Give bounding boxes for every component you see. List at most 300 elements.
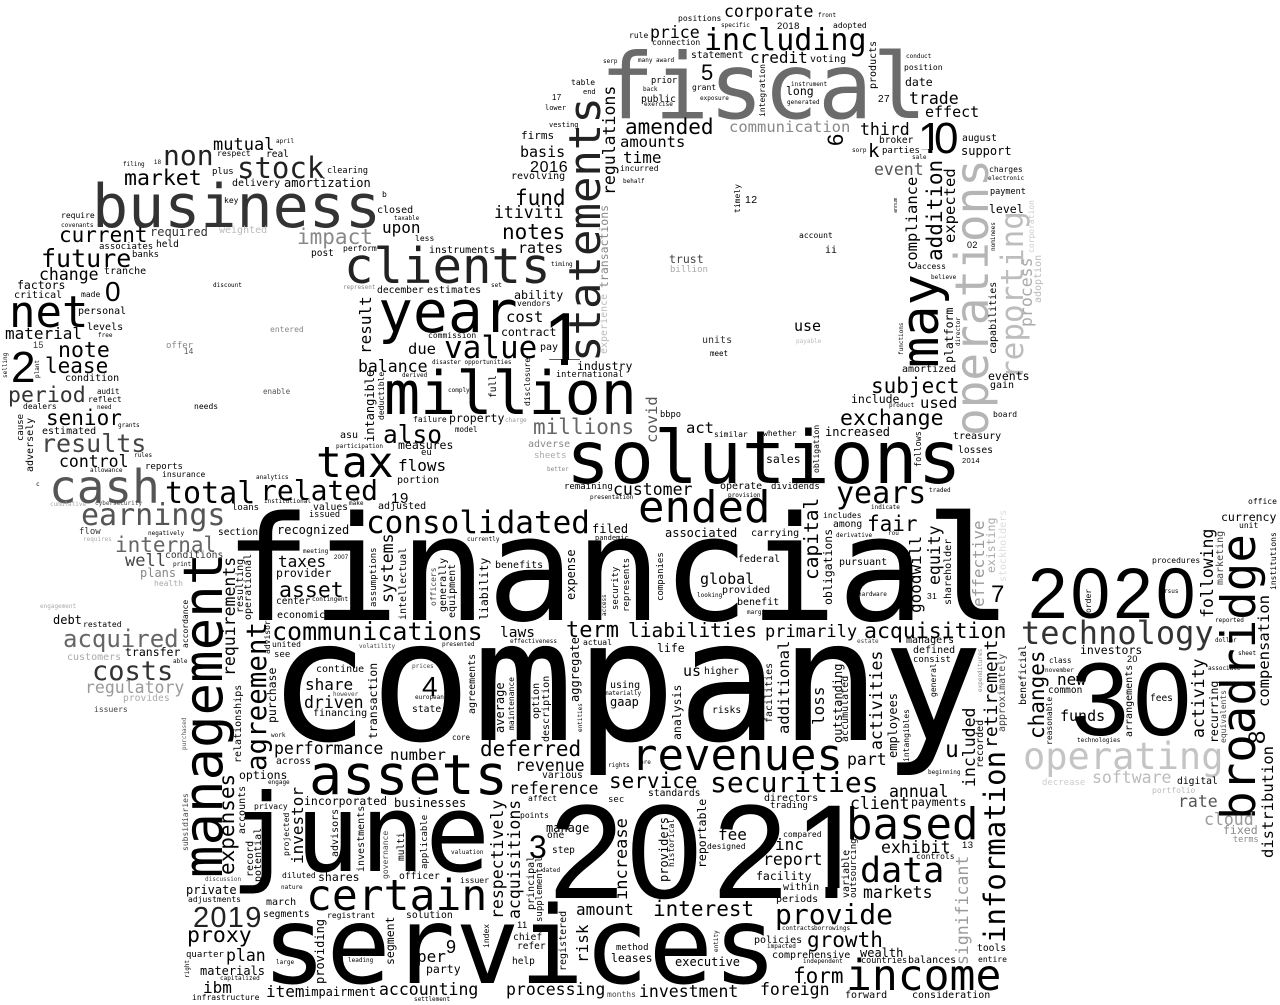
words: top arc around fiscal: position <box>904 63 943 72</box>
words: communications band and inside company: part <box>847 750 887 769</box>
words: bottom left block: solution <box>406 910 453 921</box>
word: reporting: reporting <box>995 211 1031 379</box>
words: inside financial: federal <box>738 554 780 565</box>
words: left arc: conditions <box>165 550 223 561</box>
words: centre column above financial: adverse <box>528 439 570 450</box>
words: communications band and inside company: accumulated <box>840 676 851 742</box>
words: top arc around fiscal: 17 <box>552 93 562 102</box>
words: bottom right block: trading <box>770 801 808 811</box>
words: centre column above financial: commission <box>428 331 476 340</box>
words: bottom left block: incorporated <box>304 794 387 808</box>
words: bottom right block: inc <box>775 835 804 854</box>
words: top arc around fiscal: dividends <box>771 482 820 492</box>
words: right wing: fixed <box>1223 823 1258 837</box>
words: centre column above financial: b <box>382 190 387 199</box>
words: top arc around fiscal: event <box>874 160 924 179</box>
words: right wing: 20 <box>1127 654 1138 664</box>
words: top arc around fiscal: serp <box>603 58 618 65</box>
words: top arc around fiscal: sale <box>912 154 927 161</box>
words: centre column above financial: contract <box>501 325 556 339</box>
words: communications band and inside company: expenditures <box>977 648 984 692</box>
words: bottom centre block: step <box>552 845 575 856</box>
words: centre column above financial: property <box>449 411 504 425</box>
words: bottom centre block: points <box>520 811 549 820</box>
words: left arc: debt <box>53 613 82 627</box>
words: left arc: note <box>58 338 110 363</box>
words: top arc around fiscal: 02 <box>967 240 978 250</box>
words: right wing: software <box>1092 768 1171 787</box>
words: bottom left block: businesses <box>394 796 466 810</box>
words: left arc: negatively <box>148 530 185 537</box>
words: top arc around fiscal: behalf <box>623 178 645 185</box>
words: top arc around fiscal: many award <box>638 57 675 64</box>
words: communications band and inside company: activities <box>867 651 886 750</box>
words: communications band and inside company: materially <box>605 690 642 697</box>
word: company: company <box>268 584 984 780</box>
words: top arc around fiscal: capabilities <box>988 282 999 354</box>
words: left arc: flow <box>79 527 101 537</box>
words: bottom left block: segments <box>263 909 310 920</box>
words: top arc around fiscal: sorp <box>852 147 867 154</box>
words: left arc: factors <box>17 278 65 292</box>
words: top arc around fiscal: august <box>962 133 997 144</box>
words: top arc around fiscal: rule <box>629 31 648 40</box>
words: centre column above financial: less <box>415 234 434 243</box>
words: right wing: dollar <box>1215 637 1237 644</box>
words: inside financial: obligations <box>821 529 835 605</box>
words: inside financial: 2007 <box>334 555 349 561</box>
words: communications band and inside company: loss <box>809 686 828 725</box>
words: inside financial: economic <box>277 610 325 621</box>
words: bottom right block: tools <box>977 943 1006 954</box>
words: top arc around fiscal: nominees <box>990 222 997 251</box>
words: left arc: c <box>36 481 40 488</box>
words: bottom right block: consideration <box>912 990 990 1001</box>
words: inside financial: companies <box>656 552 666 601</box>
words: left arc: accordance <box>181 600 190 648</box>
word: year: year <box>378 278 518 346</box>
words: bottom left block: valuation <box>451 849 484 856</box>
words: left arc: free <box>98 332 113 339</box>
words: top arc around fiscal: long <box>786 84 814 98</box>
words: inside financial: equity <box>925 525 944 585</box>
words: centre column above financial: timing <box>551 261 573 268</box>
words: top arc around fiscal: generated <box>787 99 820 106</box>
words: bottom left block: governance <box>381 831 390 879</box>
words: top arc around fiscal <box>545 2 1044 492</box>
words: right wing: procedures <box>1152 556 1200 565</box>
word: years: years <box>836 476 926 511</box>
words: inside financial: 7 <box>991 581 1005 608</box>
words: bottom centre block: providers <box>657 817 671 882</box>
words: top arc around fiscal: broker <box>879 135 914 146</box>
words: inside financial: filed <box>592 522 628 536</box>
words: inside financial: benefit <box>737 597 779 608</box>
words: right wing: sheet <box>1238 650 1256 657</box>
words: bottom centre block: amount <box>576 900 634 919</box>
words: communications band and inside company: analysis <box>670 685 684 740</box>
words: top arc around fiscal: annum <box>893 198 899 213</box>
words: bottom left block: 9 <box>446 937 457 957</box>
word: million: million <box>384 359 637 429</box>
words: bottom right block: outsourcing <box>849 838 859 898</box>
words: left arc: control <box>59 452 129 471</box>
words: inside financial: goodwill <box>906 536 925 613</box>
words: centre column above financial: industry <box>577 359 632 373</box>
words: centre column above financial: millions <box>533 415 634 439</box>
word: ended: ended <box>638 482 770 533</box>
words: bottom centre block: executive <box>675 955 740 969</box>
words: communications band and inside company: defined <box>913 645 955 656</box>
words: top arc around fiscal: director <box>955 317 962 346</box>
words: bottom centre block: months <box>607 990 636 999</box>
words: top arc around fiscal: payable <box>796 338 822 345</box>
words: right wing: associate <box>1208 665 1241 672</box>
word: assets: assets <box>309 743 508 807</box>
words: bottom left block: officer <box>399 871 440 882</box>
words: top arc around fiscal: payment <box>990 187 1026 197</box>
words: bottom right block: form <box>793 964 844 988</box>
words: inside financial: meeting <box>303 548 329 555</box>
words: top arc around fiscal: credit <box>750 48 808 67</box>
words: top arc around fiscal: integration <box>758 64 767 117</box>
words: top arc around fiscal: products <box>868 41 879 89</box>
words: communications band and inside company: us <box>683 662 701 680</box>
words: top arc around fiscal: adopted <box>833 21 867 30</box>
words: bottom right block: facility <box>756 869 811 883</box>
words: centre column above financial: comply <box>448 387 470 394</box>
words: left arc: april <box>276 138 294 145</box>
words: inside financial: effective <box>969 520 988 607</box>
words: bottom right block: markets <box>863 883 933 902</box>
words: inside financial: rou <box>888 530 899 537</box>
words: centre column above financial: covid <box>643 396 661 443</box>
word: information: information <box>978 751 1012 943</box>
words: left arc: future <box>41 244 131 273</box>
words: right wing: reported <box>1215 617 1244 624</box>
words: inside financial: pandemic <box>595 534 629 542</box>
words: centre column above financial: pay <box>540 342 558 353</box>
words: top arc around fiscal: timely <box>733 184 742 213</box>
words: left arc: weighted <box>219 225 267 236</box>
words: bottom left block: private <box>186 883 237 897</box>
words: top arc around fiscal: amended <box>625 115 714 139</box>
words: right wing: beneficial <box>1018 645 1029 705</box>
words: top arc around fiscal: whether <box>763 429 797 438</box>
words: inside financial: represents <box>622 558 632 612</box>
words: left arc: estimated <box>42 426 96 437</box>
words: right wing: november <box>1045 667 1074 674</box>
words: left arc: require <box>61 211 95 220</box>
words: bottom centre block: refer <box>517 941 546 952</box>
words: centre column above financial: asu <box>340 430 358 441</box>
words: top arc around fiscal: similar <box>714 430 748 439</box>
words: bottom left block: nature <box>281 884 303 891</box>
words: communications band and inside company: continue <box>316 664 364 675</box>
words: top arc around fiscal: communication <box>729 118 850 136</box>
words: left arc: real <box>266 149 289 160</box>
words: communications band and inside company: retirement <box>981 640 1002 748</box>
words: bottom left block: issuer <box>460 876 489 885</box>
words: inside financial: matrix <box>612 543 634 550</box>
words: right wing: distribution <box>1259 746 1277 858</box>
words: bottom left block: potential <box>253 828 264 882</box>
words: right wing: common <box>1048 685 1082 696</box>
words: left arc: 18 <box>154 160 162 166</box>
words: communications band and inside company: work <box>271 732 286 739</box>
words: top arc around fiscal: billion <box>670 265 708 275</box>
word: 30: 30 <box>1071 642 1196 758</box>
words: left arc: needs <box>194 402 218 411</box>
words: left arc: discount <box>213 282 242 289</box>
words: top arc around fiscal: meet <box>710 349 728 358</box>
words: bottom centre block: principal <box>526 856 537 910</box>
words: left arc: senior <box>46 406 122 430</box>
word: 2: 2 <box>11 343 37 392</box>
words: communications band and inside company: deferred <box>480 737 581 761</box>
words: right wing: fees <box>1150 693 1173 704</box>
words: inside financial: recognized <box>277 523 349 537</box>
word: 2021: 1 <box>794 778 874 927</box>
words: communications band and inside company: state <box>412 704 441 715</box>
words: communications band and inside company: facilities <box>764 663 775 723</box>
words: bottom centre block: help <box>512 956 535 967</box>
words: inside financial: expense <box>564 549 578 600</box>
words: bottom centre block: affect <box>528 794 557 803</box>
words: bottom left block: registrant <box>327 911 375 920</box>
words: left arc: 15 <box>33 340 44 350</box>
words: left arc: acquired <box>63 625 179 653</box>
words: bottom centre block: reference <box>509 779 598 798</box>
words: communications band and inside company: beginning <box>928 769 961 776</box>
words: communications band and inside company: using <box>610 680 640 691</box>
words: inside financial: shareholder <box>943 539 954 605</box>
words: left arc: perform <box>343 244 377 253</box>
words: left arc: amortization <box>284 176 371 190</box>
words: bottom right block <box>756 793 1007 1001</box>
words: top arc around fiscal: increased <box>825 425 890 439</box>
words: bottom centre block: dated <box>542 867 560 874</box>
words: bottom left block: infrastructure <box>192 993 260 1002</box>
words: bottom left block: accounts <box>237 786 248 834</box>
words: inside financial: 31 <box>927 591 937 601</box>
words: left arc: need <box>97 404 112 411</box>
words: top arc around fiscal: price <box>650 23 700 42</box>
words: inside financial: traded <box>929 487 951 494</box>
word: provide: provide <box>775 898 893 931</box>
words: left arc: represent <box>343 284 376 291</box>
words: left arc: selling <box>2 352 9 378</box>
words: communications band and inside company: description <box>541 676 552 742</box>
words: top arc around fiscal: end <box>583 88 596 96</box>
words: top arc around fiscal: corporation <box>1027 200 1036 253</box>
word: statements: statements <box>560 97 611 362</box>
words: right wing: terms <box>1233 835 1259 845</box>
words: left arc: tranche <box>104 266 146 277</box>
words: bottom left block: applicable <box>420 815 430 869</box>
words: bottom right block: report <box>763 850 823 869</box>
word: data: data <box>860 851 944 891</box>
words: centre column above financial: disaster opportunities <box>432 359 512 366</box>
words: top arc around fiscal: corporate <box>724 2 813 21</box>
words: left arc: loans <box>232 503 259 513</box>
words: left arc: reports <box>145 462 183 472</box>
words: left arc: 0 <box>105 276 122 307</box>
word: 10 <box>921 122 957 154</box>
words: communications band and inside company: term <box>566 618 619 643</box>
words: left arc: current <box>59 223 148 247</box>
words: centre column above financial: derived <box>402 372 428 379</box>
words: communications band and inside company: relationships <box>233 685 244 763</box>
words: left arc: requires <box>83 536 112 543</box>
word: 2021 <box>556 804 840 900</box>
words: centre column above financial: presentation <box>590 494 634 501</box>
words: communications band and inside company: however <box>333 691 359 698</box>
words: inside financial <box>276 487 1009 621</box>
words: left arc: stock <box>237 151 325 185</box>
words: left arc: required <box>150 225 208 239</box>
words: communications band and inside company: agreement <box>241 622 273 771</box>
words: left arc: grants <box>118 422 140 429</box>
words: bottom centre block: revenue <box>515 756 585 775</box>
words: bottom left block <box>181 756 491 1003</box>
words: centre column above financial: provision <box>728 492 761 499</box>
words: left arc: well <box>125 551 166 571</box>
words: right wing: changes <box>1025 650 1049 739</box>
words: communications band and inside company: laws <box>500 625 535 641</box>
words: communications band and inside company: purchased <box>181 717 188 750</box>
words: bottom centre block: reportable <box>695 799 709 868</box>
words: left arc: condition <box>65 373 119 384</box>
words: right wing: portfolio <box>1152 786 1196 795</box>
words: centre column above financial: measures <box>398 438 453 452</box>
words: inside financial: provider <box>276 566 331 580</box>
words: bottom left block: materials <box>200 964 265 978</box>
words: communications band and inside company: advisor <box>263 620 272 654</box>
words: left arc: delivery <box>232 178 280 189</box>
words: left arc: key <box>224 196 239 205</box>
words: centre column above financial: itiviti <box>494 203 564 222</box>
word: 10: 0 <box>934 114 960 163</box>
words: communications band and inside company: general <box>929 663 938 697</box>
words: communications band and inside company: life <box>657 641 685 655</box>
words: inside financial: hardware <box>858 591 887 598</box>
words: inside financial: looking <box>697 592 723 599</box>
words: inside financial: issued <box>309 510 340 520</box>
words: top arc around fiscal: exchange <box>840 406 944 431</box>
words: left arc: cause <box>16 414 26 441</box>
words: left arc: health <box>154 579 183 588</box>
words: top arc around fiscal: lower <box>545 104 566 112</box>
words: inside financial: includes <box>823 511 862 520</box>
words: bottom right block: variable <box>841 850 852 898</box>
words: communications band and inside company: volatility <box>359 643 396 650</box>
words: centre column above financial: firms <box>521 129 554 142</box>
words: bottom centre block: comprehensive <box>772 950 850 961</box>
words: top arc around fiscal: 2014 <box>962 456 980 465</box>
words: top arc around fiscal: subject <box>871 374 960 398</box>
words: bottom left block: advisors <box>330 809 341 857</box>
words: top arc around fiscal: k <box>868 140 880 162</box>
words: communications band and inside company: included <box>960 708 979 787</box>
words: left arc: 14 <box>184 347 194 356</box>
words: top arc around fiscal: ii <box>825 245 837 256</box>
words: centre column above financial: regulations <box>600 86 619 195</box>
words: bottom centre block: interest <box>653 897 754 921</box>
words: bottom left block: capitalized <box>220 975 260 982</box>
words: communications band and inside company: prices <box>412 663 434 670</box>
words: centre column above financial: closed <box>377 205 413 216</box>
words: top arc around fiscal: conduct <box>906 53 932 60</box>
words: left arc: regulatory <box>85 678 184 697</box>
words: top arc around fiscal: exercise <box>644 101 673 108</box>
words: top arc around fiscal: trust <box>669 252 704 266</box>
words: top arc around fiscal: functions <box>898 322 905 355</box>
words: top arc around fiscal: table <box>571 78 595 87</box>
words: top arc around fiscal: time <box>623 148 662 167</box>
words: bottom left block: accounting <box>379 980 478 999</box>
words: bottom centre block: pre <box>640 759 651 766</box>
words: bottom left block: impairment <box>304 985 376 999</box>
words: communications band and inside company: operational <box>243 554 254 620</box>
words: communications band and inside company: presented <box>442 641 475 648</box>
word: financial: financial <box>224 486 1012 655</box>
words: bottom centre block: method <box>616 943 649 953</box>
word: consolidated: consolidated <box>366 505 590 541</box>
words: left arc: provides <box>123 693 170 704</box>
words: top arc around fiscal: public <box>641 94 676 105</box>
words: communications band and inside company: average <box>493 682 507 733</box>
words: top arc around fiscal: incurred <box>620 164 659 173</box>
words: centre column above financial: upon <box>382 218 421 237</box>
words: communications band and inside company: intangibles <box>902 709 911 762</box>
words: right wing: recurring <box>1207 681 1221 743</box>
words: communications band and inside company: outstanding <box>831 664 845 743</box>
words: bottom left block: expenses <box>215 774 239 875</box>
words: inside financial: fair <box>867 512 918 536</box>
words: top arc around fiscal: act <box>686 419 714 437</box>
words: centre column above financial: flows <box>398 456 446 475</box>
words: left arc: change <box>39 265 99 284</box>
words: right wing: compensation <box>1255 595 1273 707</box>
words: communications band and inside company: managers <box>906 635 954 646</box>
words: top arc around fiscal: voting <box>810 54 846 65</box>
words: bottom centre block: increase <box>612 818 632 900</box>
words: left arc: costs <box>92 656 173 687</box>
words: right wing: currency <box>1221 510 1276 524</box>
words: centre column above financial: experience <box>599 294 610 354</box>
words: bottom left block: across <box>276 756 311 767</box>
words: top arc around fiscal: date <box>905 75 933 89</box>
words: bottom right block: growth <box>807 928 883 952</box>
words: centre column above financial: due <box>408 340 436 358</box>
words: left arc: customers <box>67 652 121 663</box>
words: bottom left block: multi <box>396 832 407 861</box>
words: top arc around fiscal: used <box>920 394 957 412</box>
words: centre column above financial: rates <box>518 239 563 257</box>
words: bottom centre block: policies <box>754 935 802 946</box>
words: left arc: issuers <box>94 705 128 714</box>
words: centre column above financial: intangible <box>363 370 377 442</box>
words: communications band and inside company: core <box>452 733 471 742</box>
words: inside financial: stockholders <box>998 510 1009 582</box>
words: top arc around fiscal: grant <box>692 83 716 92</box>
words: bottom centre block: 11 <box>517 920 528 931</box>
words: communications band and inside company: u <box>945 737 959 763</box>
words: centre column above financial: december <box>377 285 424 296</box>
words: right wing: activity <box>1189 658 1208 738</box>
words: left arc: associates <box>99 242 153 252</box>
